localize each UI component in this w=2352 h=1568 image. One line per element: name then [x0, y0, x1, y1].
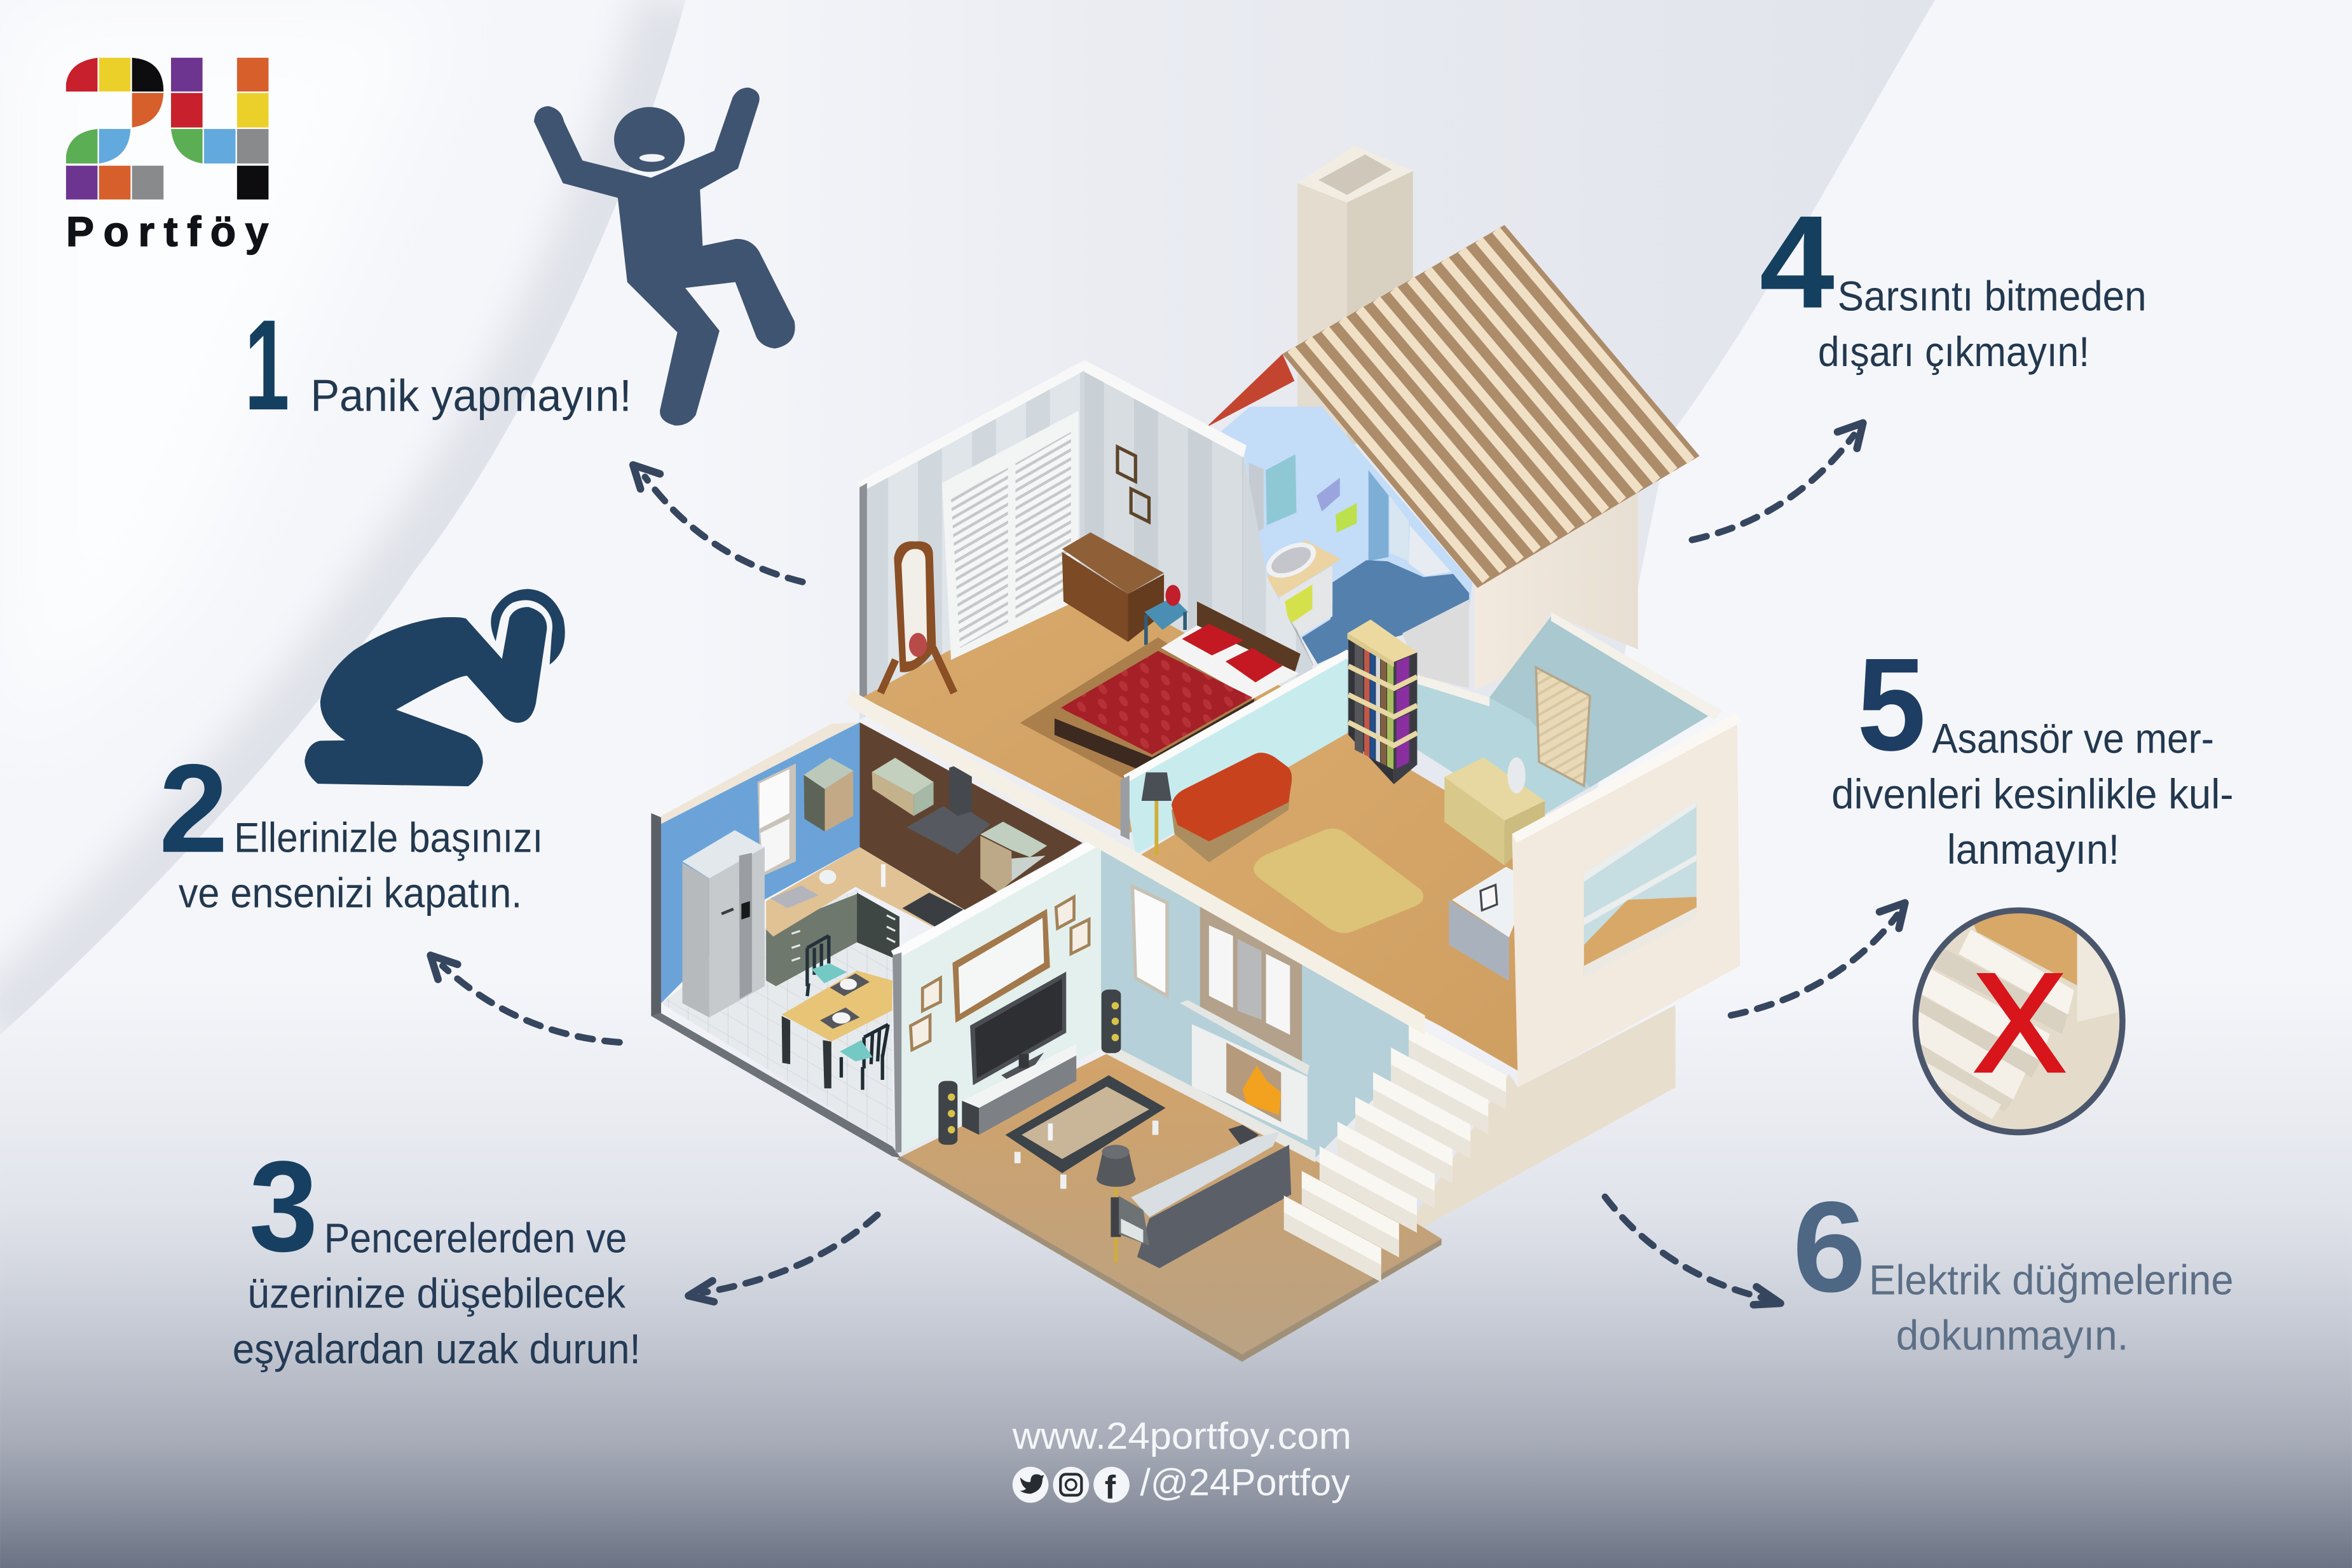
icon: facebook: f [1105, 1469, 1116, 1506]
upper living back walls [1347, 612, 1722, 834]
arrow 3 [688, 1215, 877, 1302]
icon: instagram [1053, 1467, 1089, 1503]
step 4 [1760, 189, 2147, 375]
step 5 [1831, 631, 2234, 873]
step 3: 3 [249, 1135, 318, 1279]
wall mirror [952, 909, 1050, 1023]
stairs [1284, 1023, 1506, 1282]
bookcase [1347, 620, 1417, 784]
step 5: divenleri kesinlikle kul- [1831, 770, 2234, 817]
step 4: Sarsıntı bitmeden [1838, 272, 2147, 319]
window blind [1536, 667, 1590, 786]
step 3: üzerinize düşebilecek [247, 1270, 626, 1317]
step 2: Ellerinizle başınızı [234, 814, 543, 861]
arrow 4 [1692, 423, 1863, 540]
step 4: 4 [1760, 189, 1835, 336]
dining table [782, 971, 892, 1088]
grey sofa [1111, 1125, 1291, 1268]
floor lamp upper [1142, 772, 1172, 855]
step 2: ve ensenizi kapatın. [179, 869, 522, 917]
step 3: eşyalardan uzak durun! [233, 1325, 641, 1372]
nightstand with lamp [1144, 585, 1188, 645]
bathroom [1220, 407, 1472, 688]
range hood [906, 763, 990, 854]
lower living room floor [897, 1048, 1442, 1362]
floor lamp [1097, 1145, 1135, 1262]
step 6: Elektrik düğmelerine [1869, 1256, 2234, 1303]
step 3: Pencerelerden ve [324, 1214, 627, 1261]
TV [970, 972, 1066, 1085]
arrow 1 [633, 465, 802, 582]
step 5: Asansör ve mer- [1932, 715, 2214, 762]
TV wall [891, 834, 1104, 1154]
step 5: 5 [1857, 631, 1926, 779]
chair back [807, 936, 847, 996]
living wall window [1133, 887, 1167, 996]
large window [1200, 903, 1302, 1063]
arrow 5 [1731, 903, 1905, 1015]
wall frames [1118, 447, 1149, 522]
footer: website: www.24portfoy.com [1012, 1415, 1351, 1457]
roof rafters [1283, 225, 1700, 588]
dresser upper room [1444, 758, 1545, 866]
step 2 [159, 739, 543, 917]
kitchen window [758, 763, 796, 877]
step 2: 2 [159, 739, 228, 879]
step 5: lanmayın! [1947, 826, 2119, 873]
rug [1254, 829, 1423, 933]
appliance [1449, 867, 1518, 981]
speakers [938, 990, 1121, 1145]
isometric house [651, 146, 1740, 1362]
dresser [1062, 533, 1164, 642]
TV console [962, 1044, 1076, 1135]
red roof gable [1206, 354, 1294, 427]
coffee table [1006, 1075, 1165, 1189]
base cabinets [766, 892, 899, 986]
living right wall [1101, 842, 1422, 1162]
bedroom floor [863, 577, 1327, 834]
gable wall [1475, 480, 1638, 690]
lower beige wall [1388, 1005, 1676, 1257]
cream front wall with window [1512, 712, 1740, 1087]
floor divider ledge [846, 690, 1425, 1035]
living room furniture [938, 972, 1506, 1282]
kitchen [651, 722, 1083, 1158]
step 4: dışarı çıkmayın! [1818, 328, 2089, 375]
fridge [682, 830, 765, 1018]
upper living floor [1128, 732, 1518, 1071]
fireplace [1180, 1000, 1309, 1140]
wall cabinet [804, 758, 853, 831]
logo: 24 Portföy: Portföy [66, 208, 269, 255]
red X mark: X [1974, 944, 2065, 1101]
footer: handle: /@24Portfoy [1140, 1462, 1350, 1504]
icon: forbidden stairs magnifier [1912, 908, 2126, 1135]
bed [1020, 601, 1301, 787]
icon: twitter [1013, 1467, 1048, 1503]
step 1: Panik yapmayın! [310, 371, 631, 421]
step 1 [245, 293, 631, 437]
step 6: 6 [1793, 1175, 1866, 1319]
step 3 [233, 1135, 641, 1372]
bedroom walls [856, 360, 1313, 720]
chimney [1297, 146, 1413, 450]
wardrobe [942, 411, 1079, 660]
icon: crouching person [304, 589, 565, 786]
step 1: 1 [245, 293, 289, 437]
logo: 24 Portföy [66, 58, 269, 255]
icon: panicking person [534, 88, 795, 425]
icon: facebook [1093, 1467, 1130, 1506]
chair front [840, 1025, 888, 1090]
standing mirror [880, 542, 954, 693]
footer: social icons [1013, 1467, 1130, 1506]
arrow 6 [1605, 1197, 1781, 1305]
divider wall [1121, 650, 1347, 855]
cabinet on brown wall [872, 758, 934, 816]
wall picture frames [910, 897, 1089, 1050]
counter [766, 847, 963, 937]
right cabinet [980, 822, 1047, 892]
red sofa [1172, 753, 1292, 862]
step 6 [1793, 1175, 2234, 1359]
arrow 2 [430, 955, 620, 1042]
step 6: dokunmayın. [1896, 1312, 2128, 1359]
